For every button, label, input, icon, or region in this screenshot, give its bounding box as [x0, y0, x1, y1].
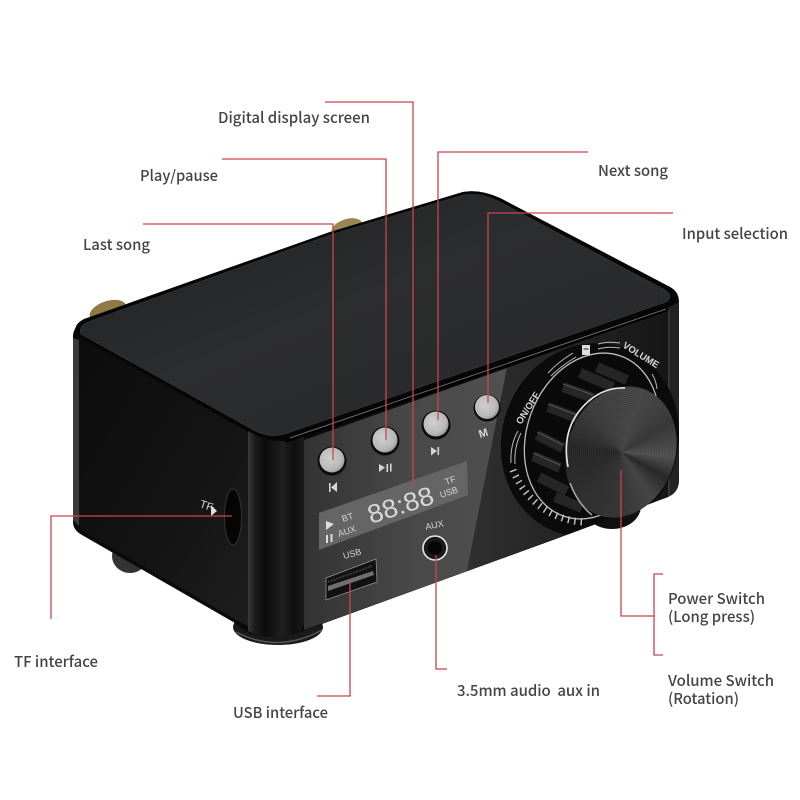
leader line: last song: [143, 224, 333, 460]
label: volume switch: Volume Switch: [667, 670, 774, 691]
LCD display: [319, 461, 468, 550]
body silhouette: [73, 191, 679, 637]
side face with TF slot: TF: [198, 498, 215, 514]
LCD display: TF: [444, 474, 458, 487]
leader line: input selection: [488, 213, 673, 403]
AUX jack: [423, 518, 447, 560]
label: audio aux in: 3.5mm audio aux in: [457, 680, 600, 701]
knob rim highlight: [566, 388, 625, 515]
side face with TF slot: [73, 338, 248, 626]
label: volume switch: [667, 670, 774, 709]
leader line: TF interface: [51, 516, 232, 619]
rubber feet: [112, 483, 641, 645]
USB port: [326, 546, 377, 600]
leader line: digital display screen: [325, 102, 413, 487]
LCD display: USB: [439, 485, 459, 500]
label: power switch: [668, 588, 765, 627]
front panel dark section: [467, 310, 668, 571]
button icons: M: [477, 427, 490, 441]
volume dial markings: ON/OFF: [514, 390, 543, 427]
leader line and bracket: power and volume switch: [621, 470, 663, 655]
label: digital display screen: Digital display screen: [218, 107, 370, 128]
AUX jack: AUX: [424, 518, 445, 532]
label: power switch: Power Switch: [668, 588, 765, 609]
label: input selection: Input selection: [682, 223, 788, 244]
label: power switch: (Long press): [668, 606, 755, 627]
label: next song: Next song: [598, 160, 668, 181]
button icons: [329, 427, 490, 492]
volume knob collar: [502, 334, 682, 538]
knob brushed metal top: [547, 371, 695, 533]
label: TF interface: TF interface: [14, 651, 98, 672]
LCD display: BT: [341, 511, 355, 524]
top glass panel: [75, 191, 678, 441]
front panel grey section: [304, 368, 507, 630]
amplifier device: [73, 191, 706, 645]
vertical front corner: [248, 430, 304, 637]
leader line: audio aux in: [436, 555, 447, 669]
label: volume switch: (Rotation): [668, 688, 739, 709]
LCD display: AUX: [337, 524, 357, 539]
knob black surround: [500, 343, 679, 535]
label: last song: Last song: [83, 234, 150, 255]
leader line: next song: [438, 152, 588, 420]
leader line: play/pause: [222, 159, 386, 440]
label: USB interface: USB interface: [233, 702, 328, 723]
function buttons: [318, 394, 500, 476]
volume dial markings: VOLUME: [620, 340, 661, 371]
label: play/pause: Play/pause: [140, 165, 218, 186]
USB port: USB: [342, 546, 362, 561]
gold speaker terminals: [87, 214, 365, 326]
leader line: USB interface: [317, 582, 350, 696]
volume dial markings: [511, 340, 661, 522]
LCD display: 88:88: [364, 480, 438, 530]
